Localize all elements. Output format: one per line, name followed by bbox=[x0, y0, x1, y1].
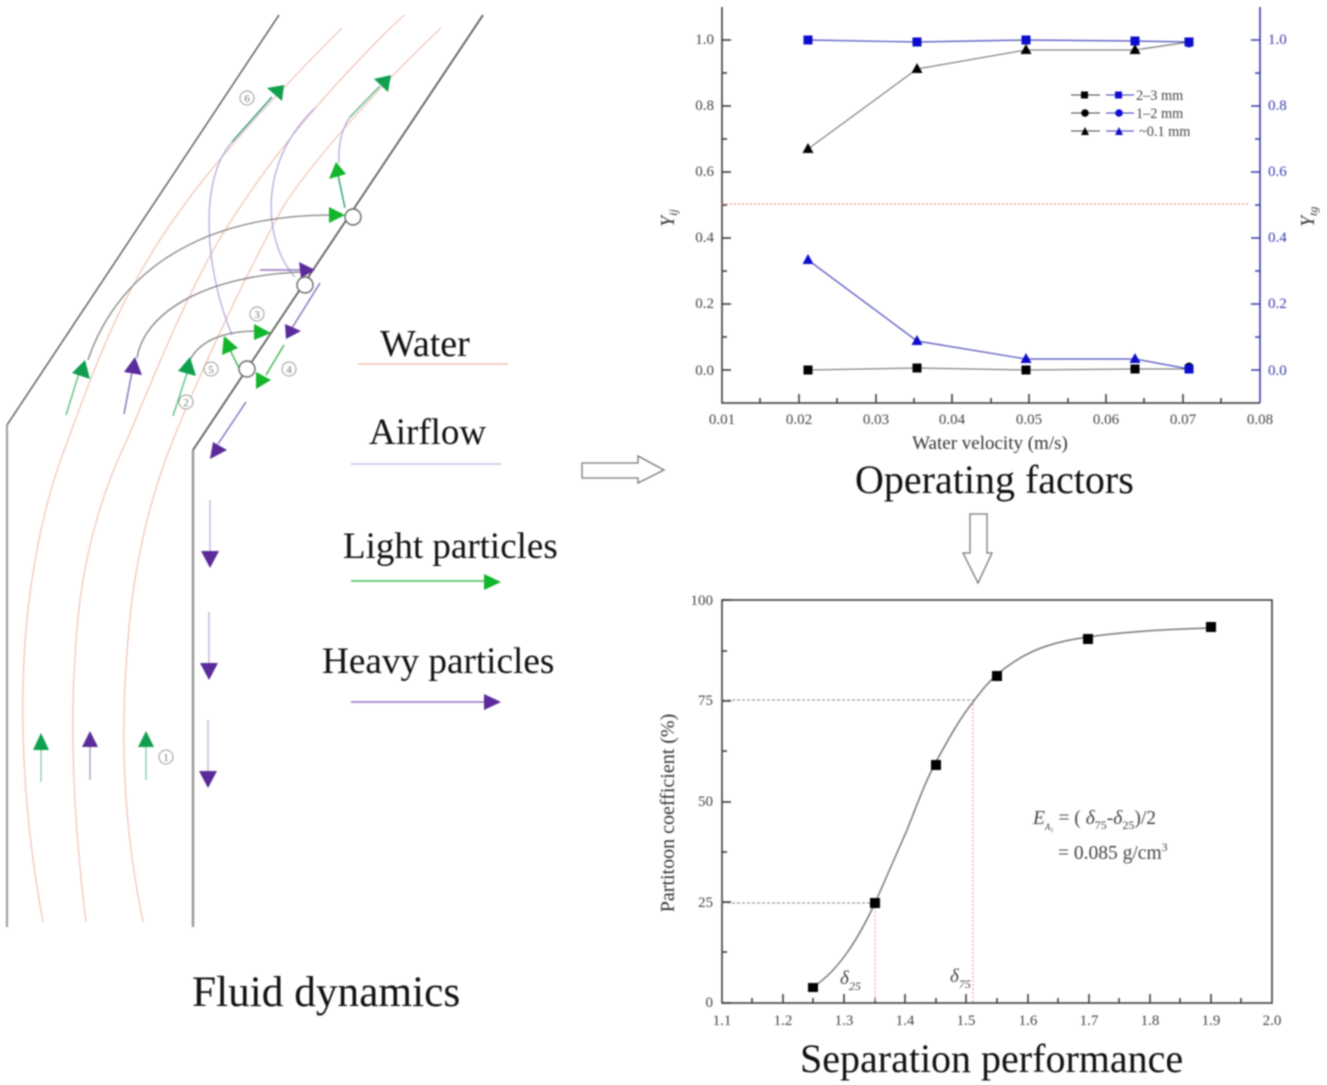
series: black bbox=[802, 42, 1194, 374]
numbered markers: 2 bbox=[183, 397, 189, 409]
airflow streamlines bbox=[209, 108, 350, 335]
water streamlines bbox=[23, 15, 441, 922]
x axis labels: 0.07 bbox=[1170, 412, 1197, 428]
legend: heavy particles: Heavy particles bbox=[322, 641, 554, 682]
x axis labels: 1.6 bbox=[1019, 1013, 1038, 1029]
x axis labels: 1.5 bbox=[957, 1013, 975, 1029]
particle trajectories bbox=[88, 215, 333, 360]
formula: 75 bbox=[1095, 818, 1107, 832]
arrow: to operating factors bbox=[582, 456, 664, 483]
left axis labels: 1.0 bbox=[695, 32, 714, 48]
fitted curve bbox=[813, 628, 1211, 987]
chart legend bbox=[1071, 88, 1190, 140]
x axis labels: 1.1 bbox=[713, 1013, 731, 1029]
y axis labels: 25 bbox=[698, 895, 713, 911]
formula: )/2 bbox=[1134, 808, 1156, 829]
collision points bbox=[239, 209, 361, 377]
reference lines bbox=[722, 700, 973, 1003]
delta labels: 75 bbox=[959, 977, 971, 991]
left axis labels: 0.6 bbox=[695, 164, 714, 180]
right axis bbox=[1251, 7, 1260, 403]
right axis title: tg bbox=[1306, 207, 1320, 216]
channel walls bbox=[7, 15, 483, 927]
chart legend: ~0.1 mm bbox=[1139, 124, 1190, 140]
formula: δ bbox=[1086, 808, 1096, 829]
legend: airflow: Airflow bbox=[369, 412, 486, 453]
numbered markers: 6 bbox=[244, 93, 250, 105]
x axis labels: 0.01 bbox=[709, 412, 735, 428]
axes frame bbox=[722, 600, 1272, 1003]
panel: fluid dynamics diagram bbox=[7, 15, 483, 927]
x axis labels: 1.2 bbox=[774, 1013, 792, 1029]
data points bbox=[808, 622, 1216, 992]
chart: operating factors bbox=[657, 7, 1320, 454]
numbered markers: 4 bbox=[286, 364, 292, 376]
x axis labels: 0.04 bbox=[939, 412, 966, 428]
left axis title: ij bbox=[666, 209, 680, 216]
series: blue bbox=[802, 36, 1194, 374]
x axis labels: 0.02 bbox=[786, 412, 812, 428]
formula: = ( bbox=[1054, 808, 1086, 829]
right axis labels: 0.8 bbox=[1268, 98, 1287, 114]
right axis labels: 0.6 bbox=[1268, 164, 1287, 180]
right axis labels: 0.4 bbox=[1268, 230, 1287, 246]
x axis labels: 1.8 bbox=[1141, 1013, 1159, 1029]
right axis labels: 0.2 bbox=[1268, 296, 1287, 312]
delta labels bbox=[840, 966, 971, 993]
right axis labels: 0.0 bbox=[1268, 363, 1287, 379]
legend: light particles: Light particles bbox=[343, 526, 558, 567]
chart legend: 2–3 mm bbox=[1136, 88, 1183, 104]
y axis labels: 75 bbox=[698, 693, 713, 709]
reference line at 0.5 bbox=[722, 203, 1250, 205]
delta labels: 25 bbox=[849, 979, 861, 993]
y axis labels: 0 bbox=[706, 995, 713, 1011]
x axis labels: 1.4 bbox=[896, 1013, 915, 1029]
legend: light particles bbox=[343, 526, 558, 590]
x axis labels bbox=[713, 1013, 1281, 1029]
left axis title: Y bbox=[657, 216, 679, 227]
delta labels: δ bbox=[840, 968, 849, 989]
formula: = 0.085 g/cm bbox=[1058, 843, 1162, 864]
legend: water: Water bbox=[380, 323, 470, 365]
arrow: to separation performance bbox=[963, 514, 992, 583]
left axis labels bbox=[695, 32, 714, 379]
left axis labels: 0.4 bbox=[695, 230, 714, 246]
y axis labels bbox=[690, 593, 713, 1011]
numbered markers bbox=[159, 91, 296, 764]
heavy particle arrows bbox=[82, 262, 320, 788]
x axis labels: 0.06 bbox=[1093, 412, 1120, 428]
chart legend: 1–2 mm bbox=[1136, 106, 1183, 122]
numbered markers: 5 bbox=[208, 364, 214, 376]
right axis title: Y bbox=[1297, 216, 1319, 227]
x axis labels bbox=[709, 412, 1273, 428]
y axis labels: 100 bbox=[690, 593, 713, 609]
x axis labels: 0.08 bbox=[1247, 412, 1273, 428]
delta labels: δ bbox=[950, 966, 959, 987]
x axis labels: 0.03 bbox=[863, 412, 889, 428]
formula: - bbox=[1107, 808, 1113, 829]
light particle arrows bbox=[33, 75, 391, 782]
formula: δ bbox=[1113, 808, 1123, 829]
x axis labels: 1.7 bbox=[1080, 1013, 1099, 1029]
x axis labels: 2.0 bbox=[1263, 1013, 1281, 1029]
left axis labels: 0.8 bbox=[695, 98, 714, 114]
x axis labels: 1.9 bbox=[1202, 1013, 1220, 1029]
numbered markers: 3 bbox=[254, 309, 260, 321]
right axis labels: 1.0 bbox=[1268, 32, 1287, 48]
legend: heavy particles bbox=[322, 641, 554, 710]
axes frame bbox=[722, 7, 1260, 403]
heading: fluid dynamics: Fluid dynamics bbox=[192, 968, 460, 1016]
formula: E bbox=[1032, 808, 1045, 829]
x axis title: Water velocity (m/s) bbox=[912, 433, 1068, 454]
formula: 3 bbox=[1162, 840, 1168, 854]
x axis labels: 0.05 bbox=[1016, 412, 1042, 428]
left axis labels: 0.2 bbox=[695, 296, 714, 312]
y axis title: Partitoon coefficient (%) bbox=[657, 714, 679, 912]
legend: flow types bbox=[322, 323, 558, 710]
y axis labels: 50 bbox=[698, 794, 713, 810]
heading: separation performance: Separation performance bbox=[800, 1036, 1183, 1081]
formula: A₅ bbox=[1044, 822, 1054, 832]
chart: separation performance bbox=[657, 593, 1281, 1029]
left axis labels: 0.0 bbox=[695, 363, 714, 379]
right axis labels bbox=[1268, 32, 1287, 379]
numbered markers: 1 bbox=[163, 752, 169, 764]
formula bbox=[1032, 808, 1168, 864]
heading: operating factors: Operating factors bbox=[855, 457, 1134, 502]
x axis labels: 1.3 bbox=[835, 1013, 853, 1029]
formula: 25 bbox=[1122, 818, 1134, 832]
